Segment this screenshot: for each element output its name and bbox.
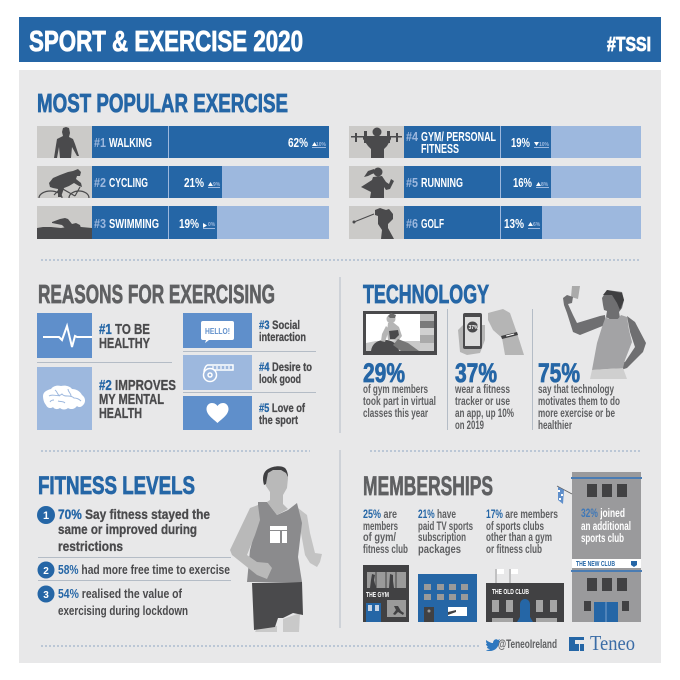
stat: 75%: say that technology: [538, 384, 614, 396]
building: the new club: an additional: [581, 519, 631, 533]
stat: 17%: [486, 509, 558, 556]
row: walking: #1: [94, 135, 106, 150]
reason 4: #4 Desire to: [259, 360, 312, 374]
building: the gym: THE GYM: [366, 592, 389, 599]
reason 3: [183, 313, 306, 348]
building: the new club: [557, 472, 642, 622]
stat: 29%: [363, 358, 436, 420]
row: gym: [349, 126, 641, 158]
panel: most popular exercise: [37, 88, 641, 239]
row: walking: 62%: [288, 135, 308, 150]
stat: 21%: paid TV sports: [418, 521, 473, 533]
row: swimming: #3: [94, 216, 106, 231]
heading: MEMBERSHIPS: [363, 471, 493, 501]
row: gym: 19%: [511, 135, 530, 150]
row: swimming: 0%: [208, 222, 216, 228]
reason 2: #2 IMPROVES: [99, 378, 176, 394]
item 3: 3: [43, 590, 49, 601]
illustration: man with phone: [563, 286, 646, 379]
item 1: restrictions: [58, 538, 123, 554]
reason 2: HEALTH: [99, 406, 142, 422]
reason 5: the sport: [259, 413, 298, 427]
footer: twitter handle: [486, 637, 557, 651]
stat: 25%: members: [363, 521, 398, 533]
stat: 29%: took part in virtual: [363, 396, 436, 408]
reason 5: [183, 396, 306, 430]
stat: 17%: of sports clubs: [486, 521, 544, 533]
item 3: exercising during lockdown: [58, 604, 188, 618]
stat: 75%: more exercise or be: [538, 408, 615, 420]
row: cycling: 9%: [213, 182, 221, 188]
icon: brain: [37, 367, 92, 430]
reason 1: HEALTHY: [99, 336, 150, 352]
panel: reasons for exercising: [37, 279, 316, 430]
stat: 21%: 21% have: [418, 509, 456, 521]
stat: 25%: [363, 509, 408, 556]
shorts: [252, 582, 303, 630]
icon: walker: [54, 127, 79, 158]
item 2: [38, 562, 230, 578]
stat: 21%: packages: [418, 544, 461, 556]
stat: 25%: fitness club: [363, 544, 408, 556]
stat: 21%: subscription: [418, 532, 466, 544]
stat: 37%: an app, up 10%: [455, 408, 514, 420]
hair: [263, 466, 288, 485]
row: golf: [349, 206, 641, 239]
stat: 37%: [454, 358, 514, 432]
icon: golfer: [352, 208, 394, 239]
logo on vest: [270, 526, 287, 543]
icon: phone and fitness band: [458, 309, 524, 355]
stat: 75%: 75%: [538, 358, 580, 388]
row: cycling: 21%: [184, 175, 204, 190]
stat: 75%: [538, 358, 620, 432]
icon: heart: [183, 396, 252, 430]
item 2: 2: [43, 566, 49, 577]
footer: twitter handle: @TeneoIreland: [498, 637, 557, 651]
stat: 21%: [418, 509, 473, 556]
item 2: 58% had more free time to exercise: [58, 563, 230, 577]
reason 2: [37, 367, 176, 430]
row: running: RUNNING: [421, 175, 463, 190]
stat: 25%: 25% are: [363, 509, 397, 521]
row: cycling: [37, 166, 329, 198]
row: golf: 6%: [533, 222, 541, 228]
stat: 37%: on 2019: [455, 420, 484, 432]
row: swimming: [37, 206, 329, 239]
row: cycling: #2: [94, 175, 106, 190]
row: cycling: CYCLING: [109, 175, 148, 190]
heading: FITNESS LEVELS: [38, 472, 195, 500]
title: SPORT & EXERCISE 2020: [29, 26, 303, 58]
row: walking: 10%: [316, 142, 327, 148]
row: walking: WALKING: [109, 135, 152, 150]
reason 4: look good: [259, 372, 301, 386]
panel: memberships: [363, 471, 642, 622]
row: gym: 10%: [539, 142, 550, 148]
row: gym: FITNESS: [421, 141, 459, 156]
stat: 37%: 37%: [455, 358, 497, 388]
reason 4: [183, 355, 312, 390]
stat: 17%: or fitness club: [486, 544, 542, 556]
item 1: 1: [43, 510, 49, 522]
vest: [247, 502, 302, 582]
row: walking: [37, 126, 329, 158]
heading: REASONS FOR EXERCISING: [38, 279, 275, 309]
footer: Teneo logo: Teneo: [590, 631, 635, 655]
building: TV sports: [418, 574, 477, 622]
icon: cyclist: [39, 169, 89, 198]
icon: tape measure: [183, 355, 252, 390]
stat: 17%: 17% are members: [486, 509, 558, 521]
left arm: [230, 505, 272, 579]
icon: runner woman: [361, 168, 394, 198]
heading: TECHNOLOGY: [363, 279, 489, 309]
icon: speech bubble: HELLO!: [205, 326, 230, 336]
row: swimming: 19%: [179, 216, 199, 231]
row: running: 8%: [541, 182, 549, 188]
icon: phone and fitness band: 37%: [468, 325, 479, 331]
footer: Teneo logo: [569, 631, 635, 655]
icon: heartbeat: [37, 313, 92, 358]
panel: fitness levels: [37, 466, 322, 632]
stat: 25%: of gym/: [363, 532, 397, 544]
row: running: [349, 166, 641, 198]
legs: [255, 613, 300, 632]
building: the new club: THE NEW CLUB: [576, 561, 615, 568]
reason 3: interaction: [259, 330, 306, 344]
illustration: runner: [230, 466, 322, 632]
row: swimming: SWIMMING: [109, 216, 159, 231]
item 3: [38, 586, 188, 618]
reason 2: MY MENTAL: [99, 392, 164, 408]
icon: weightlifter: [351, 128, 402, 158]
row: running: 16%: [513, 175, 532, 190]
row: gym: GYM/ PERSONAL: [421, 129, 496, 144]
head and neck: [264, 467, 288, 515]
icon: swimmer: [37, 218, 92, 239]
right arm: [298, 508, 322, 567]
heading: MOST POPULAR EXERCISE: [37, 88, 288, 118]
stat: 29%: classes this year: [363, 408, 428, 420]
icon: twitter bird: [486, 639, 500, 651]
item 1: 70% Say fitness stayed the: [58, 506, 210, 522]
building: the old club: THE OLD CLUB: [492, 589, 529, 596]
building: the new club: 32% joined: [581, 506, 625, 520]
row: golf: GOLF: [421, 216, 444, 231]
stat: 75%: healthier: [538, 420, 572, 432]
row: running: #5: [406, 175, 418, 190]
reason 5: #5 Love of: [259, 401, 306, 415]
row: golf: 13%: [504, 216, 524, 231]
item 1: [37, 506, 210, 554]
reason 1: #1 TO BE: [99, 322, 150, 338]
stat: 37%: wear a fitness: [454, 384, 510, 396]
stat: 37%: tracker or use: [455, 396, 510, 408]
building: the new club: sports club: [581, 531, 624, 545]
stat: 17%: other than a gym: [486, 532, 552, 544]
stat: 29%: 29%: [363, 358, 405, 388]
building: the old club: [486, 569, 564, 622]
bunting: [557, 486, 572, 504]
reason 1: [37, 313, 150, 358]
icon: tablet with yoga class: [363, 311, 437, 355]
panel: technology: [363, 279, 646, 432]
item 1: same or improved during: [58, 521, 197, 537]
stat: 75%: motivates them to do: [538, 396, 620, 408]
row: gym: #4: [406, 129, 419, 144]
stat: 29%: of gym members: [363, 384, 428, 396]
reason 3: #3 Social: [259, 318, 300, 332]
hashtag: #TSSI: [607, 34, 651, 56]
item 3: 54% realised the value of: [58, 587, 183, 601]
building: the gym: [363, 565, 409, 622]
row: golf: #6: [406, 216, 418, 231]
header banner: [19, 17, 661, 62]
